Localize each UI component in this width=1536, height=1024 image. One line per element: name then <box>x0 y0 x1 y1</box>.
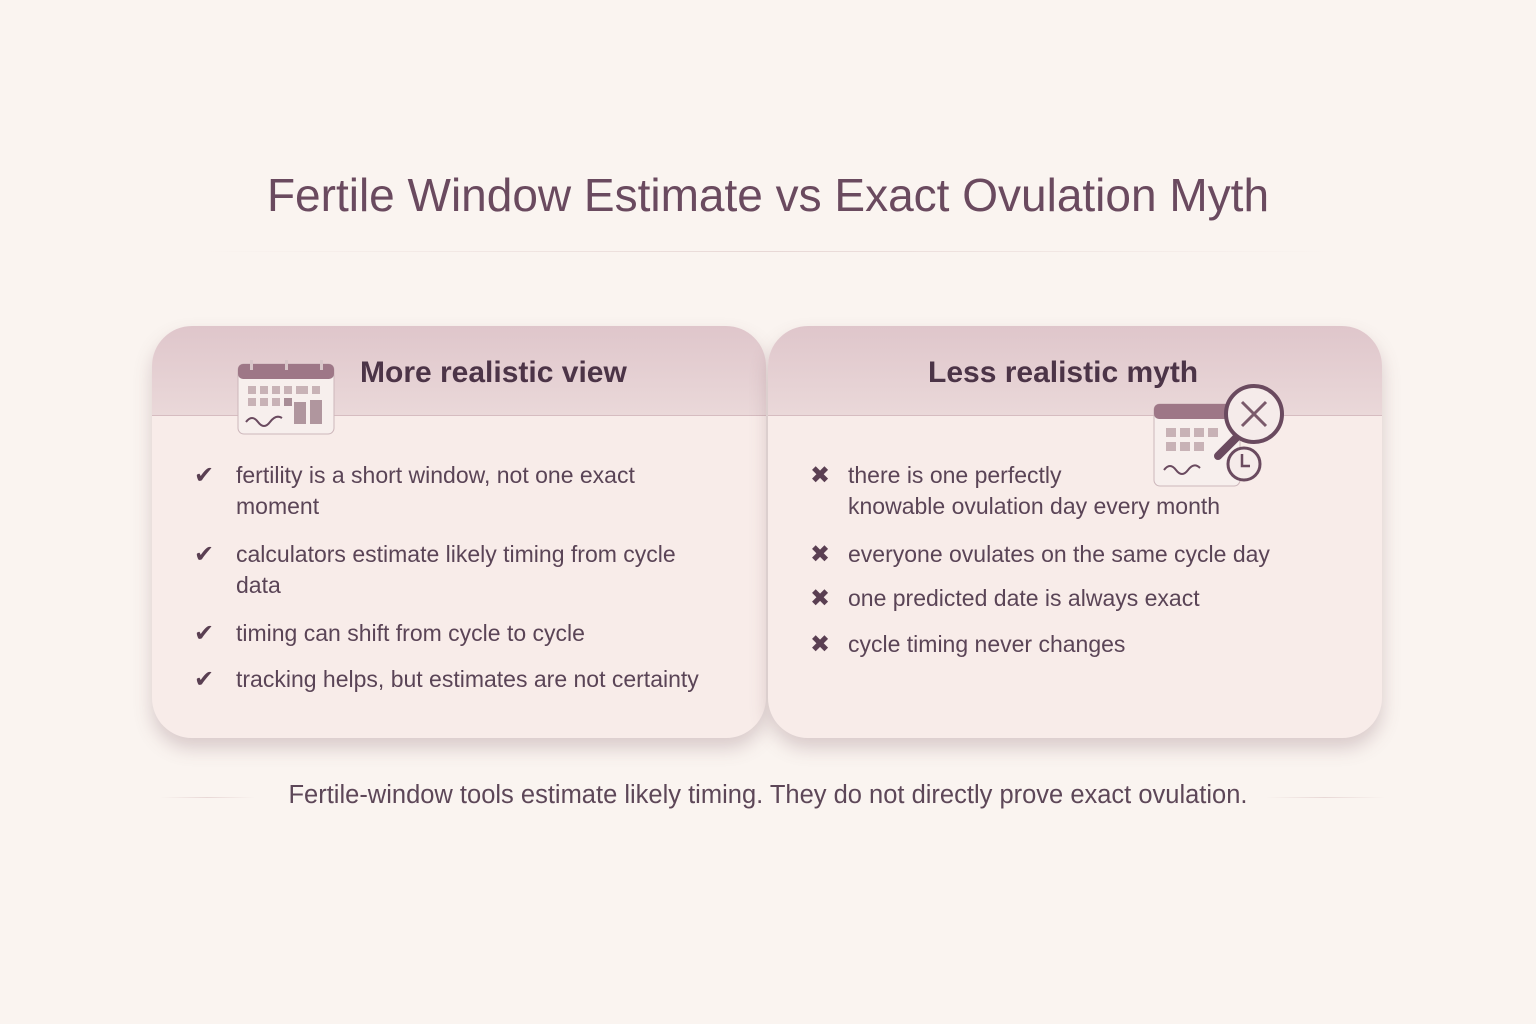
heading: less realistic myth: Less realistic myth <box>928 356 1198 389</box>
item: one predicted date is always exact <box>848 585 1200 611</box>
heading: more realistic view: More realistic view <box>360 356 627 389</box>
panel: less realistic myth: ✖ <box>810 541 830 568</box>
panel: more realistic view: ✔ <box>194 541 214 568</box>
item: fertility is a short window, not one exact moment <box>236 462 635 519</box>
item <box>810 462 1220 519</box>
item: timing can shift from cycle to cycle <box>236 620 585 646</box>
panel: more realistic view: ✔ <box>194 462 214 489</box>
item: tracking helps, but estimates are not certainty <box>236 666 699 692</box>
item: knowable ovulation day every month <box>848 493 1220 519</box>
panel: less realistic myth: ✖ <box>810 631 830 658</box>
item: cycle timing never changes <box>848 631 1125 657</box>
panel: less realistic myth <box>768 326 1382 738</box>
panel: more realistic view: ✔ <box>194 620 214 647</box>
icon: calendar with magnifier <box>1154 384 1284 486</box>
footer note: Fertile-window tools estimate likely timing. They do not directly prove exact ovulation. <box>288 781 1248 809</box>
panel: less realistic myth: ✖ <box>810 585 830 612</box>
item: there is one perfectly <box>848 462 1062 488</box>
panel: more realistic view: ✔ <box>194 666 214 693</box>
item: everyone ovulates on the same cycle day <box>848 541 1270 567</box>
panel: more realistic view <box>152 326 766 738</box>
panel: less realistic myth: ✖ <box>810 462 830 489</box>
icon: calendar <box>238 360 334 434</box>
item: calculators estimate likely timing from cycle data <box>236 541 676 598</box>
title: Fertile Window Estimate vs Exact Ovulation Myth <box>267 169 1269 221</box>
